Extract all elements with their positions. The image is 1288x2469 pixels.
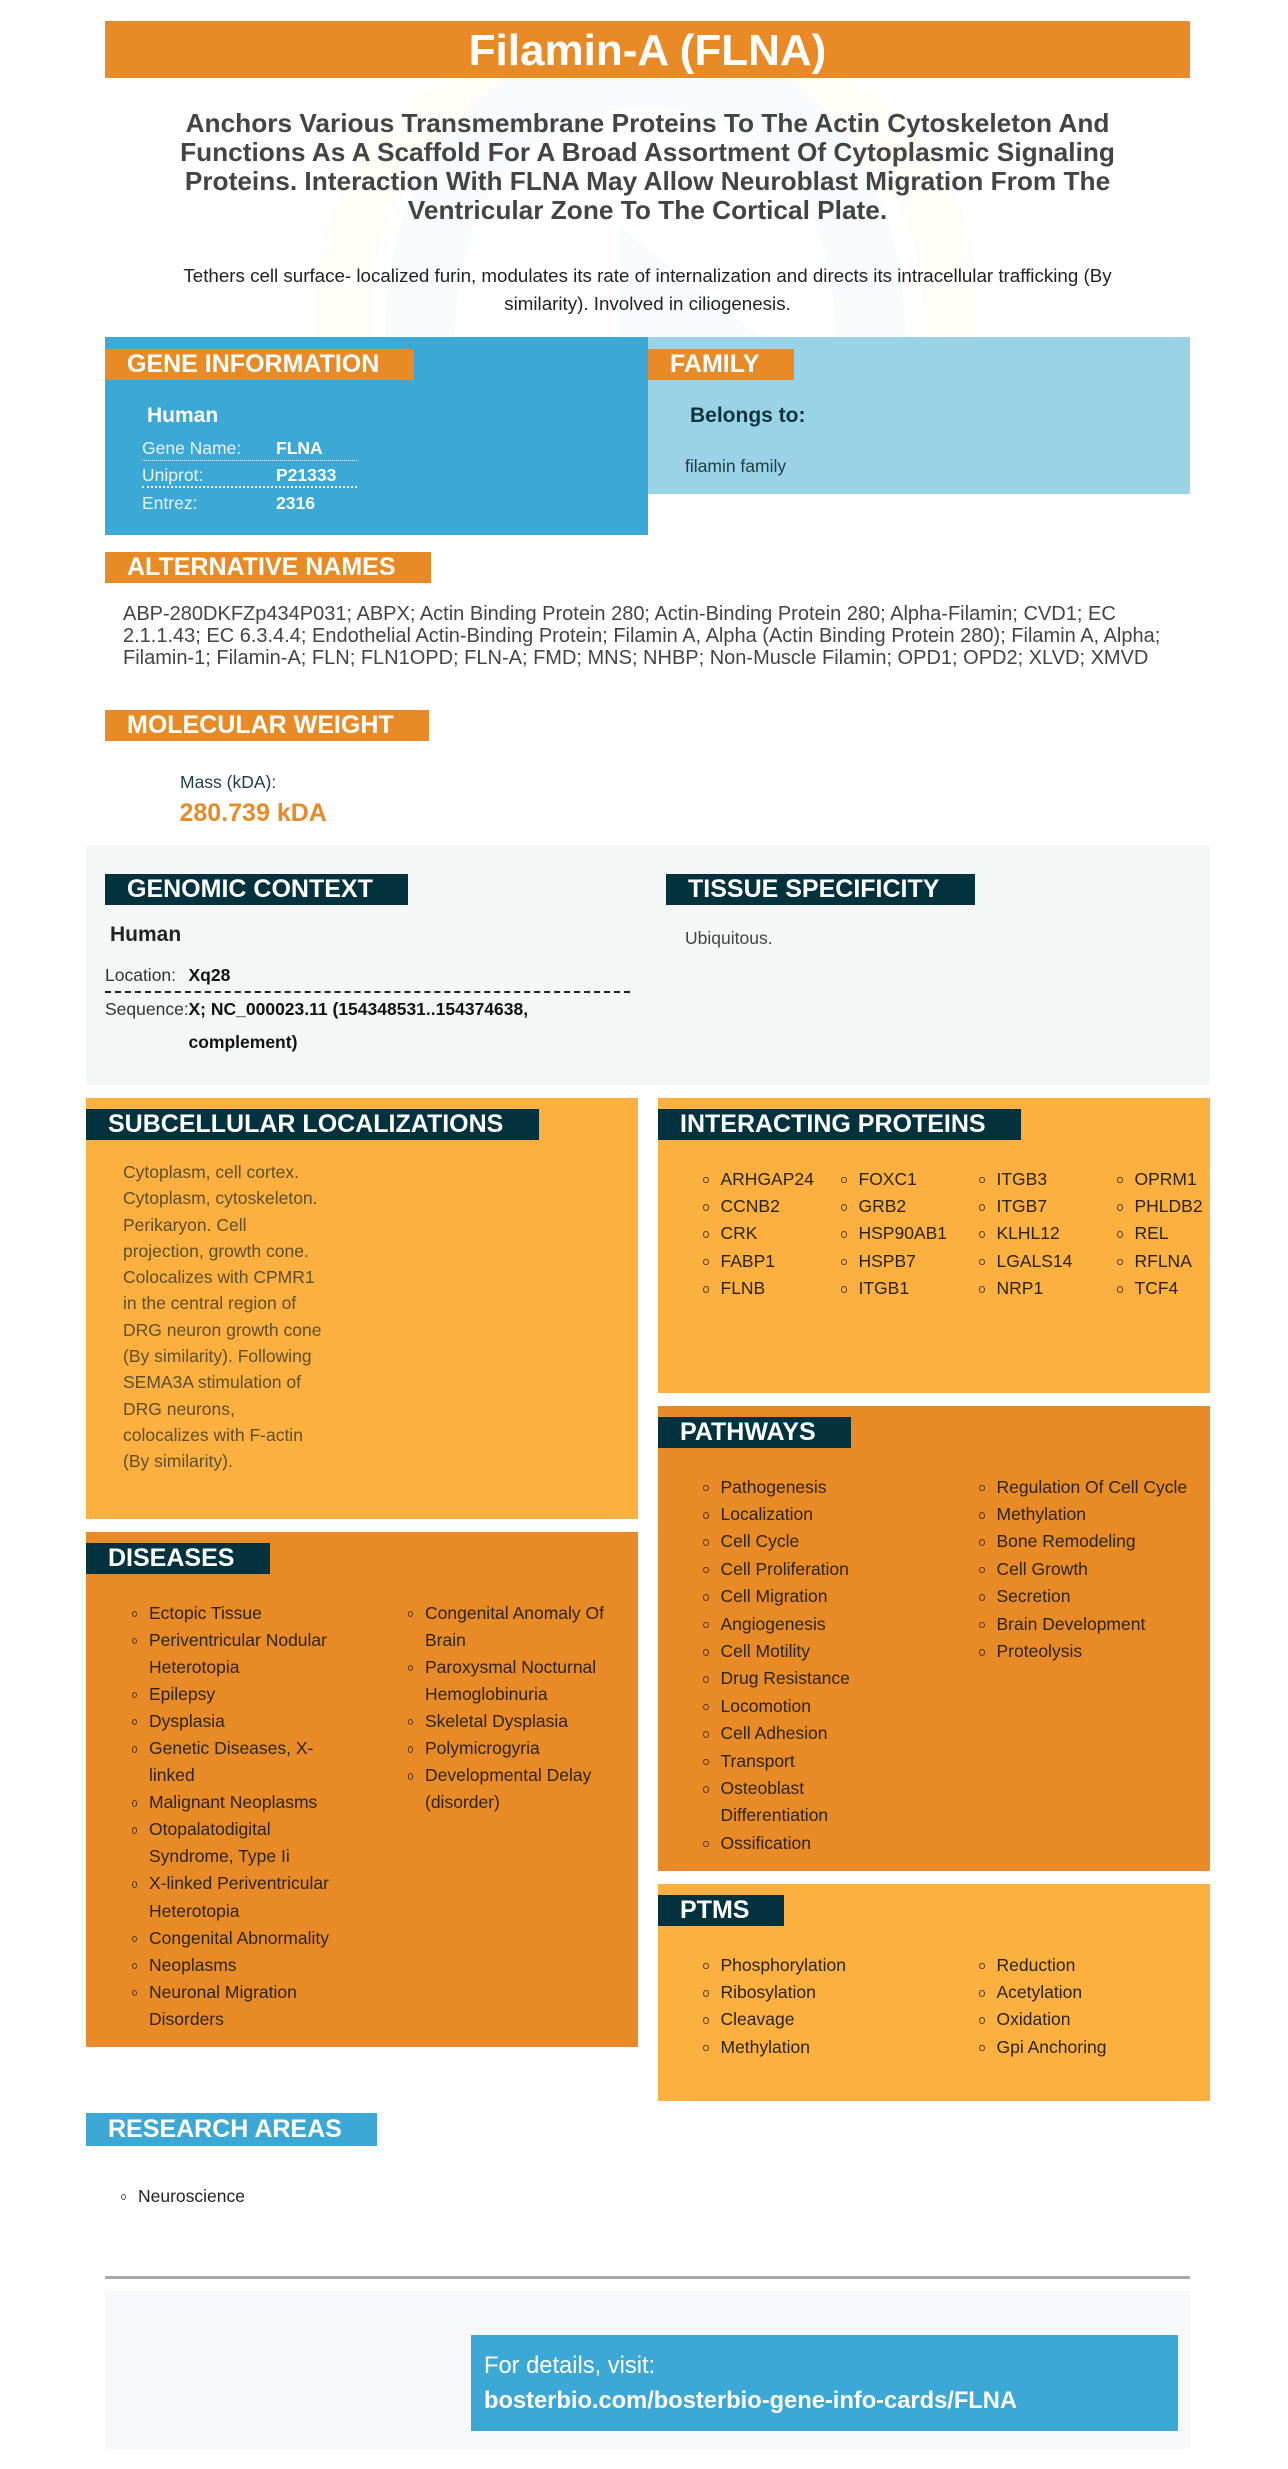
heading: diseases: [86, 1543, 270, 1574]
ptms list col 2: Reduction: [996, 1954, 1075, 1974]
gene info table: FLNA: [276, 438, 323, 458]
subtitle: Anchors Various Transmembrane Proteins To The Actin Cytoskeleton And: [186, 108, 1109, 138]
diseases list col 2: Skeletal Dysplasia: [425, 1711, 568, 1731]
diseases list col 1: Periventricular Nodular: [149, 1630, 327, 1650]
heading: alternative names: ALTERNATIVE NAMES: [127, 553, 396, 581]
interacting proteins list col 1: FABP1: [720, 1251, 775, 1271]
heading: diseases: DISEASES: [108, 1544, 234, 1572]
genomic sequence: X; NC_000023.11 (154348531..154374638,: [188, 998, 528, 1018]
gene info table: Entrez:: [142, 492, 197, 512]
callout label: For details, visit:: [484, 2353, 655, 2379]
pathways list col 1: Locomotion: [720, 1696, 811, 1716]
diseases list col 2: Developmental Delay: [425, 1765, 591, 1785]
tissue specificity text: Ubiquitous.: [685, 928, 773, 948]
panel: diseases: [86, 1532, 638, 2047]
subcellular text: (By similarity).: [123, 1451, 233, 1471]
pathways list col 2: Proteolysis: [996, 1641, 1082, 1661]
pathways list col 1: Angiogenesis: [720, 1614, 826, 1634]
subcellular text: Cytoplasm, cytoskeleton.: [123, 1188, 318, 1208]
pathways list col 2: Brain Development: [996, 1614, 1145, 1634]
pathways list col 1: Differentiation: [720, 1805, 828, 1825]
alternative names text: ABP-280DKFZp434P031; ABPX; Actin Binding Protein 280; Actin-Binding Protein 280; Alpha-Filamin; CVD1; EC: [123, 603, 1116, 625]
pathways list col 2: Bone Remodeling: [996, 1531, 1136, 1551]
description: [183, 264, 1112, 314]
description: Tethers cell surface- localized furin, modulates its rate of internalization and directs its intracellular trafficking (By: [183, 264, 1112, 286]
subcellular text: colocalizes with F-actin: [123, 1425, 303, 1445]
diseases list col 1: X-linked Periventricular: [149, 1873, 329, 1893]
subcellular text: SEMA3A stimulation of: [123, 1372, 301, 1392]
description: similarity). Involved in ciliogenesis.: [504, 293, 791, 314]
callout url: bosterbio.com/bosterbio-gene-info-cards/FLNA: [484, 2388, 1017, 2414]
subcellular text: projection, growth cone.: [123, 1241, 309, 1261]
interacting proteins list col 2: [841, 1168, 947, 1298]
gene info table: Gene Name:: [142, 438, 241, 458]
interacting proteins list col 1: CCNB2: [720, 1196, 780, 1216]
pathways list col 1: Cell Migration: [720, 1586, 827, 1606]
pathways list col 1: Cell Motility: [720, 1641, 810, 1661]
alternative names text: [123, 603, 1160, 669]
ptms list col 1: Phosphorylation: [720, 1954, 846, 1974]
interacting proteins list col 2: HSPB7: [858, 1251, 916, 1271]
callout: details link: [471, 2335, 1178, 2431]
interacting proteins list col 3: NRP1: [996, 1278, 1043, 1298]
panel: gene information: [105, 337, 648, 535]
panel: pathways: [658, 1406, 1210, 1871]
heading: interacting proteins: INTERACTING PROTEINS: [680, 1110, 986, 1138]
heading: gene information: GENE INFORMATION: [127, 350, 379, 378]
interacting proteins list col 3: ITGB3: [996, 1168, 1047, 1188]
diseases list col 2: Brain: [425, 1630, 466, 1650]
diseases list col 2: Paroxysmal Nocturnal: [425, 1657, 596, 1677]
pathways list col 1: Drug Resistance: [720, 1668, 850, 1688]
interacting proteins list col 3: KLHL12: [996, 1223, 1060, 1243]
diseases list col 1: Otopalatodigital: [149, 1819, 271, 1839]
interacting proteins list col 4: OPRM1: [1134, 1168, 1197, 1188]
heading: family: FAMILY: [670, 350, 759, 378]
genomic location: Location:: [105, 964, 176, 984]
heading: ptms: [658, 1895, 784, 1926]
subtitle: Functions As A Scaffold For A Broad Assortment Of Cytoplasmic Signaling: [180, 137, 1115, 167]
diseases list col 2: Congenital Anomaly Of: [425, 1602, 604, 1622]
diseases list col 2: [408, 1602, 604, 1812]
subcellular text: Perikaryon. Cell: [123, 1215, 247, 1235]
heading: research areas: [86, 2113, 377, 2146]
genomic species: Human: [110, 923, 181, 946]
subcellular text: Colocalizes with CPMR1: [123, 1267, 315, 1287]
pathways list col 1: Pathogenesis: [720, 1476, 827, 1496]
diseases list col 1: linked: [149, 1765, 195, 1785]
interacting proteins list col 3: LGALS14: [996, 1251, 1072, 1271]
mass value: 280.739 kDA: [180, 798, 327, 826]
interacting proteins list col 1: CRK: [720, 1223, 757, 1243]
heading: molecular weight: MOLECULAR WEIGHT: [127, 711, 394, 739]
title: [105, 21, 1190, 78]
subcellular text: [123, 1162, 321, 1471]
panel: ptms: [658, 1884, 1210, 2101]
family value: filamin family: [685, 456, 786, 476]
gene info table: Uniprot:: [142, 464, 203, 484]
interacting proteins list col 2: ITGB1: [858, 1278, 909, 1298]
diseases list col 1: Heterotopia: [149, 1657, 239, 1677]
background watermark logo: [280, 78, 1020, 338]
ptms list col 1: [703, 1954, 846, 2057]
diseases list col 1: Neuronal Migration: [149, 1982, 297, 2002]
pathways list col 1: Cell Cycle: [720, 1531, 799, 1551]
genomic sequence: [105, 998, 528, 1052]
alternative names text: Filamin-1; Filamin-A; FLN; FLN1OPD; FLN-A; FMD; MNS; NHBP; Non-Muscle Filamin; OPD1; OPD2; XLVD; XMVD: [123, 647, 1148, 669]
interacting proteins list col 3: ITGB7: [996, 1196, 1047, 1216]
heading: pathways: PATHWAYS: [680, 1418, 816, 1446]
interacting proteins list col 1: ARHGAP24: [720, 1168, 814, 1188]
title: Filamin-A (FLNA): [469, 26, 826, 75]
heading: ptms: PTMS: [680, 1896, 749, 1924]
heading: tissue specificity: TISSUE SPECIFICITY: [688, 875, 939, 903]
interacting proteins list col 2: HSP90AB1: [858, 1223, 947, 1243]
interacting proteins list col 4: [1117, 1168, 1203, 1298]
pathways list col 2: Methylation: [996, 1504, 1086, 1524]
ptms list col 1: Ribosylation: [720, 1982, 816, 2002]
ptms list col 2: Oxidation: [996, 2009, 1070, 2029]
pathways list col 2: Regulation Of Cell Cycle: [996, 1476, 1187, 1496]
heading: research areas: RESEARCH AREAS: [108, 2115, 342, 2143]
pathways list col 1: Cell Adhesion: [720, 1723, 828, 1743]
subcellular text: DRG neuron growth cone: [123, 1320, 321, 1340]
gene info table: 2316: [276, 492, 315, 512]
interacting proteins list col 4: RFLNA: [1134, 1251, 1192, 1271]
diseases list col 1: Dysplasia: [149, 1711, 225, 1731]
interacting proteins list col 2: GRB2: [858, 1196, 906, 1216]
pathways list col 1: Localization: [720, 1504, 813, 1524]
pathways list col 2: Secretion: [996, 1586, 1070, 1606]
ptms list col 2: [979, 1954, 1106, 2057]
gene info table: [142, 438, 357, 512]
ptms list col 2: Acetylation: [996, 1982, 1082, 2002]
panel: genomic context and tissue specificity: [86, 845, 1210, 1085]
subcellular text: (By similarity). Following: [123, 1346, 312, 1366]
pathways list col 2: Cell Growth: [996, 1559, 1088, 1579]
panel: family: [648, 337, 1190, 494]
subtitle: Proteins. Interaction With FLNA May Allow Neuroblast Migration From The: [185, 166, 1110, 196]
pathways list col 1: Ossification: [720, 1833, 811, 1853]
gene info species: Human: [147, 404, 218, 427]
interacting proteins list col 1: [703, 1168, 814, 1298]
diseases list col 1: Genetic Diseases, X-: [149, 1738, 313, 1758]
diseases list col 1: Syndrome, Type Ii: [149, 1846, 290, 1866]
alternative names text: 2.1.1.43; EC 6.3.4.4; Endothelial Actin-Binding Protein; Filamin A, Alpha (Actin Binding Protein 280); Filamin A, Alpha;: [123, 625, 1160, 647]
pathways list col 1: [703, 1476, 850, 1853]
subcellular text: Cytoplasm, cell cortex.: [123, 1162, 299, 1182]
heading: genomic context: GENOMIC CONTEXT: [127, 875, 373, 903]
interacting proteins list col 1: FLNB: [720, 1278, 765, 1298]
ptms list col 2: Gpi Anchoring: [996, 2037, 1106, 2057]
genomic sequence: complement): [188, 1032, 297, 1052]
genomic location: Xq28: [188, 964, 230, 984]
panel: interacting proteins: [658, 1098, 1210, 1393]
diseases list col 1: Congenital Abnormality: [149, 1928, 329, 1948]
heading: subcellular localizations: SUBCELLULAR LOCALIZATIONS: [108, 1110, 503, 1138]
gene info table: P21333: [276, 464, 336, 484]
heading: family: [648, 349, 794, 380]
heading: pathways: [658, 1417, 851, 1448]
diseases list col 2: (disorder): [425, 1792, 500, 1812]
interacting proteins list col 2: FOXC1: [858, 1168, 917, 1188]
pathways list col 1: Cell Proliferation: [720, 1559, 849, 1579]
diseases list col 2: Polymicrogyria: [425, 1738, 540, 1758]
diseases list col 1: Ectopic Tissue: [149, 1602, 262, 1622]
subtitle: Ventricular Zone To The Cortical Plate.: [408, 195, 887, 225]
panel: footer: [105, 2291, 1190, 2449]
diseases list col 2: Hemoglobinuria: [425, 1684, 548, 1704]
diseases list col 1: Epilepsy: [149, 1684, 215, 1704]
pathways list col 1: Osteoblast: [720, 1778, 804, 1798]
subcellular text: DRG neurons,: [123, 1399, 235, 1419]
pathways list col 1: Transport: [720, 1751, 795, 1771]
belongs to: Belongs to:: [690, 404, 806, 427]
subcellular text: in the central region of: [123, 1293, 296, 1313]
diseases list col 1: [132, 1602, 329, 2029]
ptms list col 1: Cleavage: [720, 2009, 794, 2029]
interacting proteins list col 3: [979, 1168, 1072, 1298]
research areas list: Neuroscience: [138, 2186, 245, 2206]
genomic sequence: Sequence:: [105, 998, 189, 1018]
diseases list col 1: Heterotopia: [149, 1901, 239, 1921]
interacting proteins list col 4: REL: [1134, 1223, 1169, 1243]
diseases list col 1: Disorders: [149, 2009, 224, 2029]
pathways list col 2: [979, 1476, 1187, 1661]
interacting proteins list col 4: TCF4: [1134, 1278, 1178, 1298]
subtitle: [180, 108, 1115, 225]
diseases list col 1: Neoplasms: [149, 1955, 237, 1975]
mass label: Mass (kDA):: [180, 772, 276, 792]
ptms list col 1: Methylation: [720, 2037, 810, 2057]
interacting proteins list col 4: PHLDB2: [1134, 1196, 1203, 1216]
diseases list col 1: Malignant Neoplasms: [149, 1792, 317, 1812]
panel: subcellular localizations: [86, 1098, 638, 1519]
genomic location: [105, 964, 230, 984]
